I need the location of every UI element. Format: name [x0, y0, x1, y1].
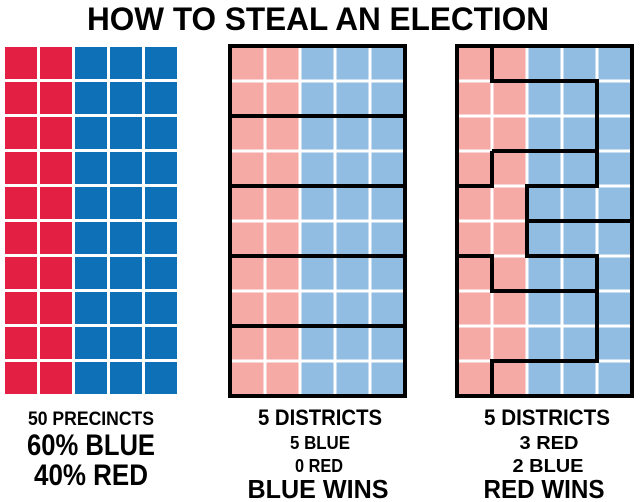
text: precinct stats	[27, 409, 155, 492]
text: gerrymander result	[484, 405, 610, 502]
text: precinct stats: 40% RED	[34, 459, 148, 492]
panel: fair districts	[230, 46, 405, 396]
title: HOW TO STEAL AN ELECTION	[87, 1, 549, 37]
text: precinct stats: 60% BLUE	[27, 429, 155, 462]
panel: precincts grid	[5, 47, 177, 394]
panel: gerrymandered districts	[457, 46, 632, 396]
text: gerrymander result: 5 DISTRICTS	[484, 405, 610, 430]
text: fair district result: 5 BLUE	[290, 433, 350, 453]
text: precinct stats: 50 PRECINCTS	[28, 409, 154, 430]
text: fair district result	[248, 405, 388, 502]
text: fair district result: 5 DISTRICTS	[258, 405, 382, 430]
text: fair district result: 0 RED	[295, 456, 343, 476]
text: gerrymander result: 3 RED	[520, 433, 579, 453]
text: gerrymander result: 2 BLUE	[512, 456, 584, 476]
